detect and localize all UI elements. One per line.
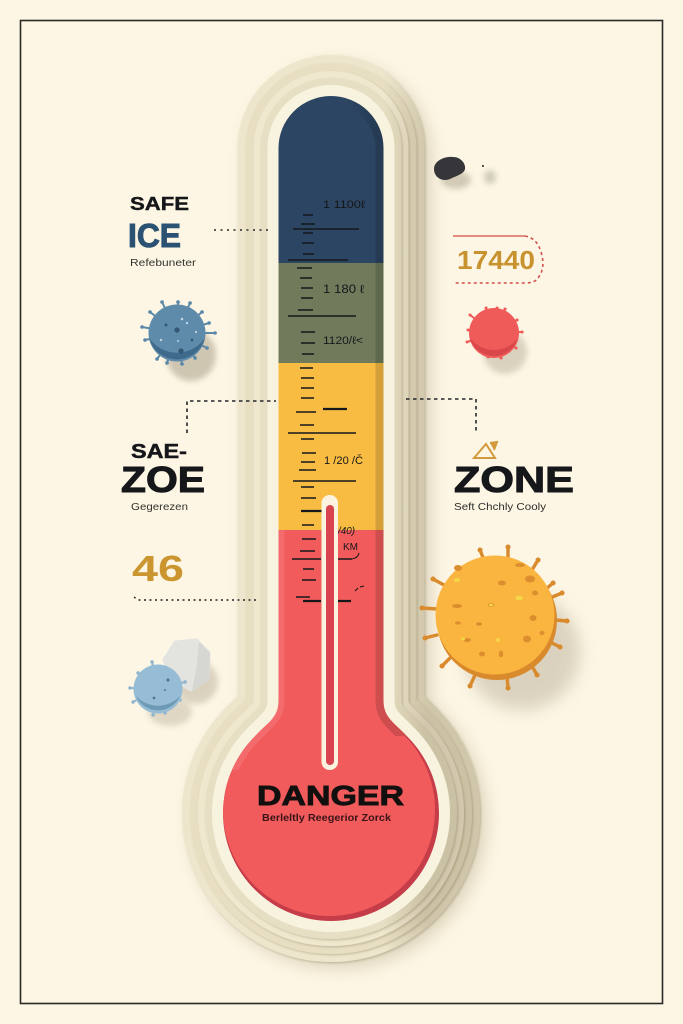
- tube left highlight: [232, 530, 284, 770]
- scale label: 1180: 1 180 ℓ: [323, 284, 364, 296]
- layered paper outline: [223, 96, 439, 921]
- dashed value box: [453, 235, 525, 237]
- icon: zone logo: [474, 442, 497, 458]
- virus spikes: [422, 547, 567, 688]
- callout: safe ice: [128, 194, 272, 269]
- bulb rim shade: [223, 725, 439, 921]
- connector: safe ice: [214, 229, 272, 231]
- icon: black rock: [434, 157, 471, 189]
- zone heading: ZONE: [454, 459, 574, 500]
- connector: sae zoe: [187, 401, 276, 433]
- capillary tube: [322, 495, 338, 770]
- ice heading: ICE: [128, 217, 181, 254]
- safe ice description: Refebuneter: [130, 258, 197, 269]
- bulb face: [223, 704, 435, 916]
- virus body rim: [437, 560, 557, 680]
- callout: sae zoe: [121, 401, 276, 600]
- icon: yellow virus: [422, 547, 580, 710]
- value: 17440: 17440: [457, 245, 535, 275]
- scale label: 40: /40): [337, 526, 355, 537]
- icon: ice rock and pale virus: [130, 641, 218, 726]
- danger heading: DANGER: [257, 780, 404, 811]
- band: red: [255, 530, 407, 736]
- sae heading: SAE-: [131, 441, 187, 463]
- zone description: Seft Chchly Cooly: [454, 501, 547, 513]
- connector: value 46: [134, 597, 258, 600]
- scale label: KM: KM: [343, 542, 358, 553]
- virus body top: [436, 556, 554, 674]
- thermometer: [200, 90, 460, 928]
- band: navy: [278, 96, 384, 263]
- danger subtitle: Berleltly Reegerior Zorck: [262, 813, 391, 824]
- band: yellow: [278, 363, 384, 530]
- value: 46: 46: [132, 548, 184, 589]
- callout: value 17440: [453, 236, 543, 283]
- virus spots: [452, 563, 544, 657]
- zoe description: Gegerezen: [131, 502, 188, 513]
- scale label: 1100: 1 1100ℓ: [323, 199, 366, 211]
- safe heading: SAFE: [130, 194, 189, 214]
- tick marks: [288, 215, 364, 601]
- connector: zone: [406, 399, 476, 432]
- virus shadow: [464, 594, 580, 710]
- icon: small dot and smudge: [482, 165, 496, 184]
- tube right edge shade: [365, 109, 406, 736]
- icon: blue virus: [142, 302, 216, 381]
- callout: zone: [406, 399, 574, 513]
- band: olive: [278, 263, 384, 363]
- colour bands: [223, 96, 439, 921]
- thermometer cast shadow: [230, 103, 446, 928]
- scale label: 1/20: 1 /20 /Č: [324, 454, 363, 467]
- icon: red virus: [467, 308, 527, 374]
- scale label: 1120: 1120/ℓ<: [323, 335, 363, 347]
- zoe heading: ZOE: [121, 459, 205, 500]
